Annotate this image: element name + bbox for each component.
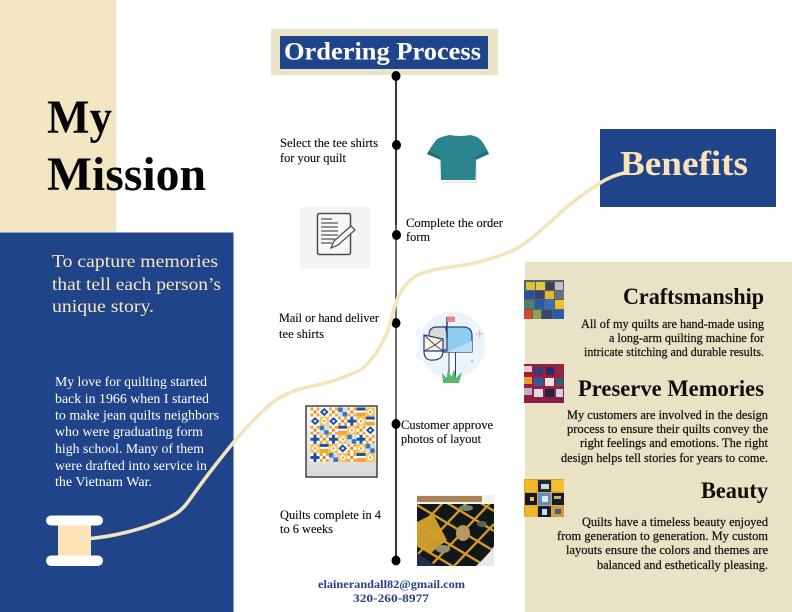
image: craftsmanship quilt thumbnail (524, 280, 564, 319)
step 4 text: photos of layout (401, 432, 481, 446)
heading: Ordering Process: Ordering Process (284, 38, 481, 66)
image: quilt layout proof (306, 406, 377, 477)
text block: preserve memories: My customers are involved in the design (567, 408, 768, 422)
step 5 text: Quilts complete in 4 (280, 508, 382, 522)
text block: preserve memories: right feelings and emotions. The right (580, 436, 769, 450)
heading: Ordering Process (271, 29, 498, 75)
text block: beauty: balanced and esthetically pleasing. (597, 558, 768, 572)
text block: quilting history (55, 374, 219, 489)
text block: quilting history: high school. Many of them (55, 441, 204, 456)
timeline (392, 71, 401, 566)
step 2 text: form (406, 230, 430, 244)
image: preserve memories quilt thumbnail (524, 364, 564, 403)
text block: quilting history: My love for quilting started (55, 374, 207, 389)
step 5 text: to 6 weeks (280, 522, 333, 536)
step 3 text: Mail or hand deliver (279, 311, 380, 325)
step 3 text (279, 311, 380, 341)
heading: My Mission: My (47, 91, 112, 144)
image: finished quilt photo (417, 495, 494, 566)
text block: preserve memories (561, 408, 769, 465)
text block: beauty (557, 515, 769, 572)
panel: benefits background (525, 262, 792, 612)
heading: Beauty: Beauty (701, 478, 768, 503)
step 2 text (406, 216, 504, 244)
image: beauty quilt thumbnail (524, 479, 564, 517)
text block: craftsmanship: a long-arm quilting machine for (609, 331, 764, 345)
mission statement: To capture memories (52, 251, 218, 271)
icon: mailbox (415, 312, 485, 383)
thread from spool to benefits (78, 173, 624, 540)
text block: craftsmanship: All of my quilts are hand-made using (581, 317, 764, 331)
step 5 text (280, 508, 382, 536)
panel: cream mission background (0, 0, 116, 232)
mission statement (52, 251, 221, 316)
step 1 text: for your quilt (280, 151, 346, 165)
text block: beauty: layouts ensure the colors and themes are (566, 543, 768, 557)
contact details: elainerandall82@gmail.com (318, 577, 465, 591)
text block: quilting history: were drafted into service in (55, 458, 207, 473)
text block: quilting history: the Vietnam War. (55, 474, 152, 489)
heading: Preserve Memories: Preserve Memories (578, 376, 764, 401)
mission statement: unique story. (52, 296, 154, 316)
icon: thread spool (46, 516, 103, 566)
text block: craftsmanship: intricate stitching and durable results. (584, 345, 764, 359)
text block: beauty: Quilts have a timeless beauty enjoyed (582, 515, 768, 529)
icon: tee shirt (427, 135, 489, 182)
benefits heading: Benefits (620, 144, 748, 183)
text block: preserve memories: process to ensure their quilts convey the (567, 422, 768, 436)
heading: Craftsmanship: Craftsmanship (623, 284, 764, 309)
step 4 text (401, 418, 493, 446)
text block: quilting history: who were graduating form (55, 424, 203, 439)
step 1 text (280, 136, 378, 165)
heading: My Mission (47, 91, 206, 201)
text block: craftsmanship (581, 317, 764, 359)
step 1 text: Select the tee shirts (280, 136, 378, 150)
text block: beauty: from generation to generation. My custom (557, 529, 769, 543)
mission statement: that tell each person’s (52, 274, 221, 294)
text block: preserve memories: design helps tell stories for years to come. (561, 451, 768, 465)
step 3 text: tee shirts (279, 327, 324, 341)
panel: blue mission background (0, 232, 234, 612)
step 2 text: Complete the order (406, 216, 504, 230)
icon: order form and pencil (300, 207, 370, 269)
panel: benefits heading box (600, 129, 776, 207)
heading: My Mission: Mission (47, 148, 206, 201)
contact details: 320-260-8977 (353, 591, 429, 605)
text block: quilting history: back in 1966 when I started (55, 391, 209, 406)
contact details (318, 577, 465, 605)
text block: quilting history: to make jean quilts neighbors (55, 408, 219, 422)
step 4 text: Customer approve (401, 418, 493, 432)
